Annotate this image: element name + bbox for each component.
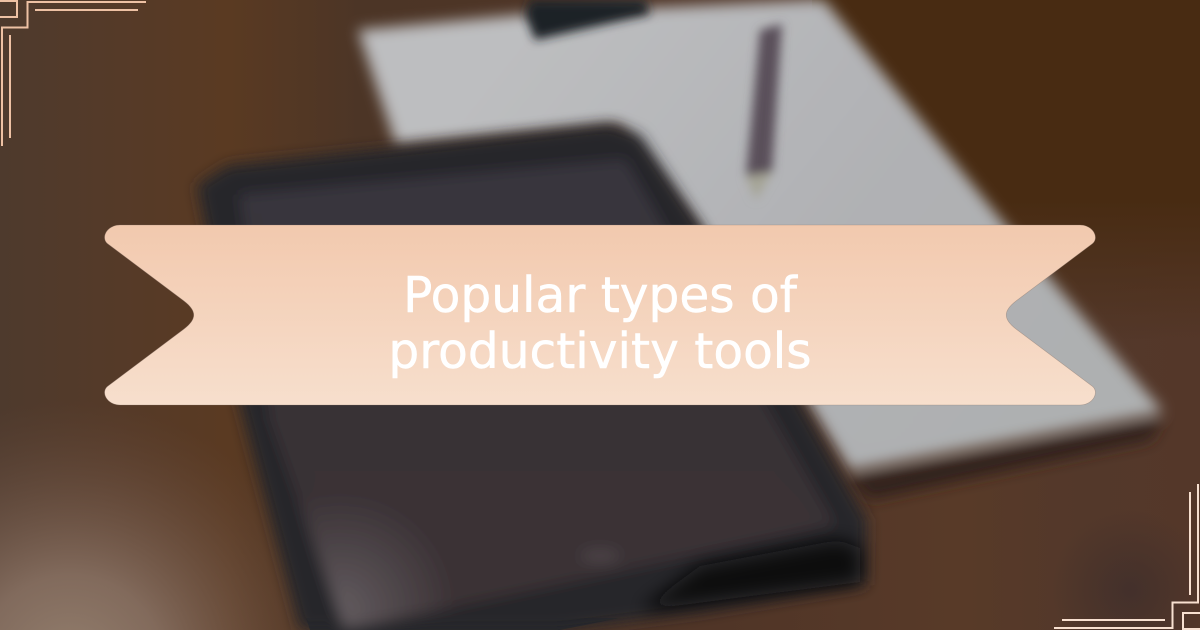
corner ornament: bottom right (1054, 484, 1200, 630)
clipboard clip (525, 0, 650, 40)
tablet (197, 124, 867, 630)
tablet lower shadow band (640, 540, 860, 610)
corner ornament: top left (0, 0, 146, 146)
title (388, 268, 812, 380)
title: productivity tools (388, 324, 812, 380)
title: Popular types of (403, 268, 797, 324)
tablet underlay at the bottom edge (306, 618, 620, 630)
clipboard paper (358, 0, 1163, 500)
pen (746, 24, 782, 200)
